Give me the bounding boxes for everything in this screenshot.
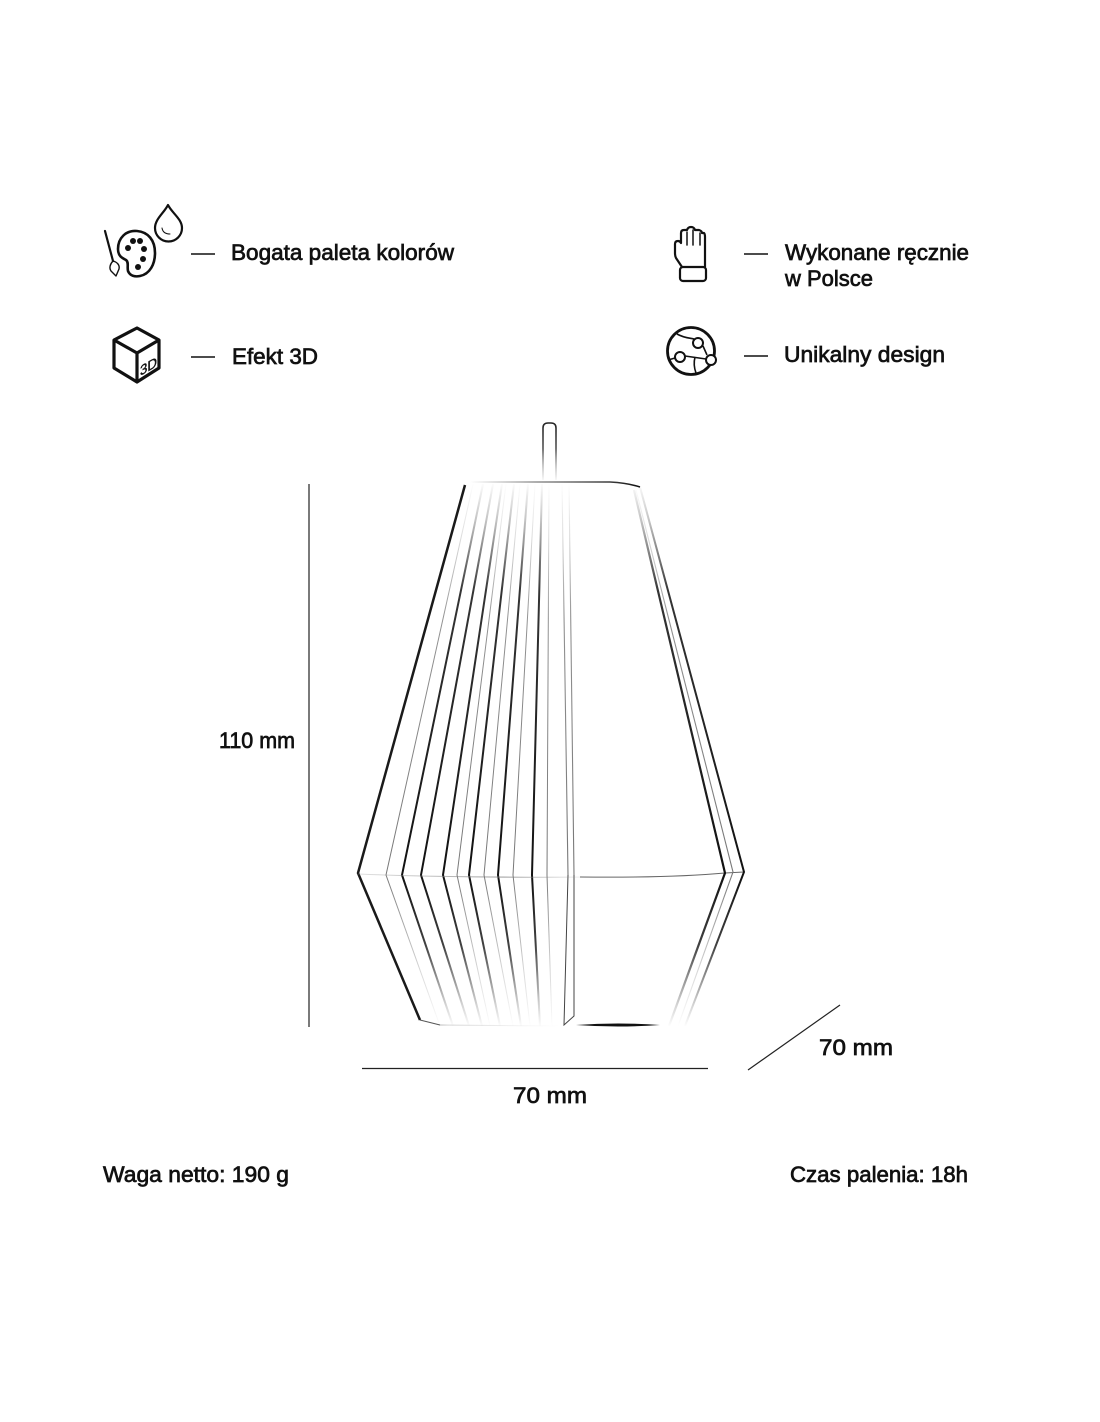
dash xyxy=(191,253,215,255)
top edge xyxy=(470,482,640,487)
feature: rich colour palette xyxy=(105,205,454,276)
dimension: depth 70 mm: 70 mm xyxy=(819,1035,893,1060)
bottom edge left xyxy=(440,1025,560,1026)
spine fold xyxy=(562,484,574,875)
icon: palette, brush and drop xyxy=(105,205,182,276)
dash xyxy=(744,355,768,357)
feature: handmade in Poland xyxy=(675,227,969,291)
dimension: height 110 mm: 110 mm xyxy=(219,728,295,753)
label: Wykonane ręcznie w Polsce: w Polsce xyxy=(784,266,873,291)
label: Wykonane ręcznie w Polsce xyxy=(784,240,969,291)
right folds xyxy=(634,487,744,1026)
net weight: Waga netto: 190 g xyxy=(103,1162,289,1187)
wick xyxy=(543,423,556,480)
dash xyxy=(744,253,768,255)
burn time: Czas palenia: 18h xyxy=(790,1162,968,1187)
left outer edge xyxy=(358,485,465,1020)
waist line left xyxy=(358,874,600,877)
candle outline drawing xyxy=(358,423,744,1026)
icon: 3D cube xyxy=(114,328,159,382)
icon: 3D cube: 3D xyxy=(140,354,157,380)
left bottom corner xyxy=(420,1020,440,1025)
thin fold lines xyxy=(386,484,552,1026)
waist line right xyxy=(580,872,744,877)
feature: 3D effect xyxy=(114,328,318,382)
dash xyxy=(191,356,215,358)
dimension: width 70 mm: 70 mm xyxy=(513,1083,587,1108)
icon: globe with nodes xyxy=(668,328,716,374)
heavy fold lines xyxy=(402,484,542,1026)
label: Unikalny design: Unikalny design xyxy=(784,342,945,367)
label: Wykonane ręcznie w Polsce: Wykonane ręcznie xyxy=(785,240,969,265)
dimension: depth 70 mm xyxy=(748,1005,893,1070)
label: Efekt 3D: Efekt 3D xyxy=(232,344,318,369)
label: Bogata paleta kolorów: Bogata paleta kolorów xyxy=(231,240,454,265)
feature: unique design xyxy=(668,328,945,374)
base shadow xyxy=(576,1024,660,1026)
icon: hand xyxy=(675,227,706,281)
